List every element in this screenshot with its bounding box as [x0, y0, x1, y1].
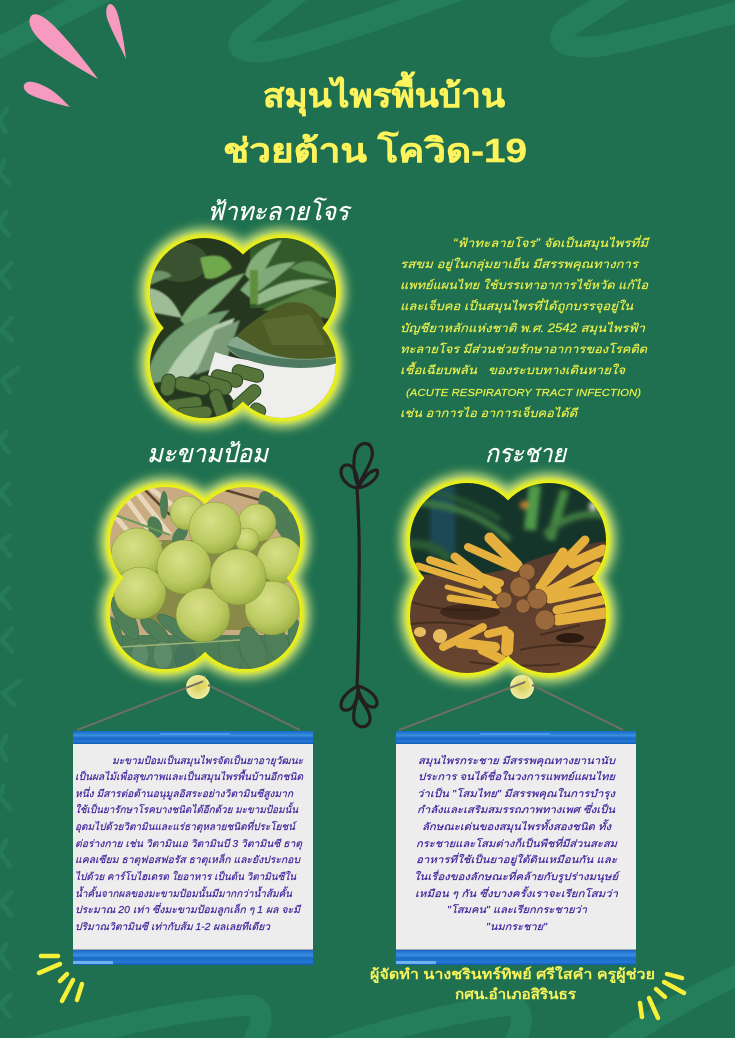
footer: author credit: ผู้จัดทำ นางชรินทร์ทิพย์ ศรีใสคำ ครูผู้ช่วย [370, 965, 655, 983]
panel text: อาหารที่ใช้เป็นยาอยู่ใต้ดินเหมือนกัน และ [416, 852, 618, 866]
text: andrographis description: และเจ็บคอ เป็นสมุนไพรที่ได้ถูกบรรจุอยู่ใน [400, 298, 634, 313]
hanging panel: fingerroot description [396, 675, 636, 965]
photo: Indian gooseberry fruits [104, 482, 305, 677]
footer: author credit [370, 965, 655, 1002]
panel text: ใช้เป็นยารักษาโรคบางชนิดได้อีกด้วย มะขามป้อมนั้น [75, 802, 299, 816]
footer: author credit: กศน.อำเภอสิรินธร [455, 986, 577, 1002]
yellow burst decoration bottom right [640, 974, 684, 1018]
title: ช่วยต้าน โควิด-19 [223, 131, 527, 169]
heading: fingerroot: กระชาย [485, 440, 568, 468]
panel text: เป็นผลไม้เพื่อสุขภาพและเป็นสมุนไพรพื้นบ้านอีกชนิด [75, 769, 304, 783]
panel text [414, 755, 620, 933]
vine divider [341, 443, 378, 727]
panel text: ต่อร่างกาย เช่น วิตามินเอ วิตามินบี 3 วิตามินซี ธาตุ [75, 838, 303, 850]
scroll top bar [73, 731, 313, 744]
panel text: มะขามป้อมเป็นสมุนไพรจัดเป็นยาอายุวัฒนะ [112, 754, 304, 767]
text: andrographis description: (ACUTE RESPIRATORY TRACT INFECTION) [406, 387, 641, 399]
text: andrographis description: เช่น อาการไอ อาการเจ็บคอได้ดี [400, 406, 579, 420]
scroll sheet [396, 743, 636, 950]
text: andrographis description: รสขม อยู่ในกลุ่มยาเย็น มีสรรพคุณทางการ [400, 257, 640, 271]
yellow burst decoration bottom left [39, 956, 82, 1001]
scroll top bar [396, 731, 636, 744]
panel text: สมุนไพรกระชาย มีสรรพคุณทางยานานับ [418, 755, 617, 767]
panel text: น้ำคั้นจากผลของมะขามป้อมนั้นมีมากกว่าน้ำส้มคั้น [75, 886, 293, 900]
panel text: ว่าเป็น "โสมไทย" มีสรรพคุณในการบำรุง [417, 787, 616, 800]
hanging panel: Indian gooseberry description [73, 675, 313, 965]
panel text: หนึ่ง มีสารต่อต้านอนุมูลอิสระอย่างวิตามินซีสูงมาก [75, 786, 294, 800]
panel text: แคลเซียม ธาตุฟอสฟอรัส ธาตุเหล็ก และยังประกอบ [75, 853, 302, 866]
panel text: อุดมไปด้วยวิตามินและแร่ธาตุหลายชนิดที่ประโยชน์ [75, 819, 297, 833]
panel text: ไปด้วย คาร์โบไฮเดรต ใยอาหาร เป็นต้น วิตามินซีใน [75, 870, 297, 883]
photo: fingerroot rhizomes on wood [405, 478, 615, 680]
panel text: "นมกระชาย" [486, 922, 547, 933]
text: andrographis description: เชื้อเฉียบพลัน ของระบบทางเดินหายใจ [400, 361, 626, 377]
heading: Indian gooseberry: มะขามป้อม [147, 440, 269, 468]
scroll bottom bar [73, 949, 313, 965]
text: andrographis description: แพทย์แผนไทย ใช้บรรเทาอาการไข้หวัด แก้ไอ [400, 278, 649, 292]
text: andrographis description: บัญชียาหลักแห่งชาติ พ.ศ. 2542 สมุนไพรฟ้า [400, 321, 646, 335]
scroll sheet [73, 743, 313, 950]
panel text: "โสมคน" และเรียกกระชายว่า [447, 904, 587, 916]
title [223, 71, 527, 169]
panel text: เหมือน ๆ กัน ซึ่งบางครั้งเราจะเรียกโสมว่า [415, 886, 618, 900]
panel text: ในเรื่องของลักษณะที่คล้ายกับรูปร่างมนุษย์ [414, 869, 620, 883]
panel text: ประการ จนได้ชื่อในวงการแพทย์แผนไทย [418, 769, 616, 783]
scroll bottom bar [396, 949, 636, 965]
panel text: กระชายและโสมต่างก็เป็นพืชที่มีส่วนสะสม [416, 836, 619, 850]
hanging rope and pin [399, 675, 623, 730]
text: andrographis description: ทะลายโจร มีส่วนช่วยรักษาอาการของโรคติด [400, 342, 648, 356]
panel text: ประมาณ 20 เท่า ซึ่งมะขามป้อมลูกเล็ก ๆ 1 ผล จะมี [75, 902, 302, 916]
hanging rope and pin [77, 675, 300, 730]
panel text: ลักษณะเด่นของสมุนไพรทั้งสองชนิด ทั้ง [422, 819, 612, 833]
panel text [75, 754, 304, 933]
pink burst decoration top left [24, 4, 126, 107]
photo: andrographis leaves, powder and capsules [145, 230, 348, 425]
panel text: กำลังและเสริมสมรรถภาพทางเพศ ซึ่งเป็น [417, 802, 616, 816]
panel text: ปริมาณวิตามินซี เท่ากับส้ม 1-2 ผลเลยทีเดียว [75, 921, 271, 933]
title: สมุนไพรพื้นบ้าน [263, 71, 505, 117]
text: andrographis description [400, 235, 650, 420]
text: andrographis description: “ฟ้าทะลายโจร” จัดเป็นสมุนไพรที่มี [453, 235, 650, 250]
heading: andrographis: ฟ้าทะลายโจร [207, 197, 351, 226]
